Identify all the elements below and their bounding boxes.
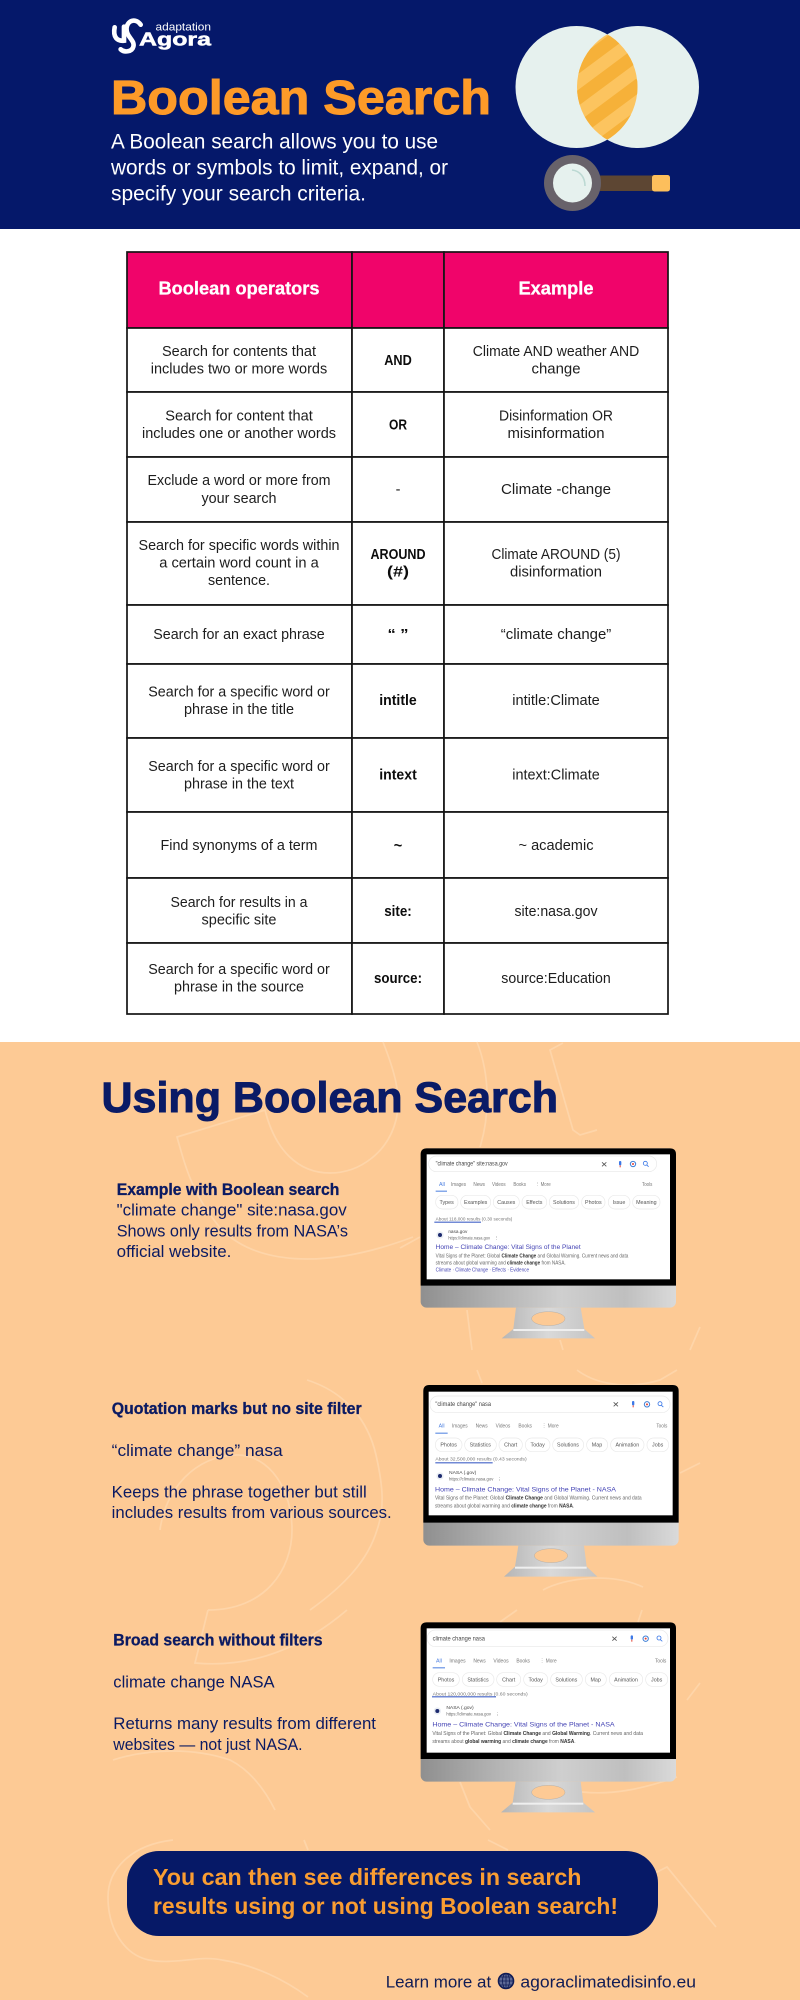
monitor: site filter results: Books	[513, 1182, 526, 1188]
row: AND: Search for contents that	[162, 344, 316, 360]
row: OR: includes one or another words	[142, 426, 336, 442]
row: AROUND: (#)	[387, 564, 409, 580]
monitor: quotation results: NASA (.gov)	[449, 1470, 477, 1476]
monitor: site filter results: https://climate.nasa.gov	[448, 1235, 491, 1240]
row: AROUND: sentence.	[208, 573, 270, 589]
row: exact phrase: Search for an exact phrase	[153, 627, 325, 643]
row: intitle: Search for a specific word or	[148, 684, 330, 700]
monitor: broad search results: Vital Signs of the Planet: Global Climate Change and Global Warming. Current news and data	[432, 1731, 643, 1737]
text block: quotation marks: “climate change” nasa	[112, 1442, 284, 1460]
monitor: quotation results: Books	[518, 1424, 532, 1430]
row: OR: Search for content that	[165, 408, 313, 424]
monitor: quotation results: Photos	[440, 1443, 457, 1449]
monitor: broad search results: Books	[516, 1658, 530, 1664]
monitor: quotation results: Images	[452, 1424, 468, 1430]
monitor: quotation results: Map	[592, 1443, 602, 1449]
row: exact phrase: “climate change”	[501, 627, 611, 643]
monitor: site filter results: Meaning	[636, 1200, 657, 1206]
footer: learn more	[386, 1972, 696, 1992]
row: AROUND: a certain word count in a	[159, 556, 320, 572]
monitor: quotation results: Vital Signs of the Planet: Global Climate Change and Global Warming. Current news and data	[435, 1496, 642, 1502]
text block: example with Boolean search: Example with Boolean search	[117, 1181, 339, 1199]
row: exact phrase	[127, 605, 668, 664]
monitor: site filter results	[421, 1148, 676, 1338]
search bar: "climate change" site:nasa.gov	[436, 1162, 508, 1168]
monitor: site filter results: Issue	[613, 1200, 625, 1206]
table: Boolean operators	[127, 252, 668, 1014]
table header row: Example	[518, 278, 594, 298]
row: AND	[127, 328, 668, 392]
row: source: source:	[374, 971, 422, 987]
monitor: broad search results: All	[436, 1658, 442, 1664]
monitor: quotation results: Videos	[496, 1424, 511, 1430]
monitor: site filter results: Climate · Climate Change · Effects · Evidence	[436, 1268, 529, 1274]
row: minus	[127, 457, 668, 522]
monitor: site filter results: streams about global warming and climate change from NASA.	[436, 1261, 566, 1267]
monitor: broad search results: Today	[529, 1677, 543, 1683]
row: synonyms: Find synonyms of a term	[160, 838, 318, 854]
monitor: site filter results: ⋮ More	[535, 1182, 551, 1188]
callout: differences in search results	[127, 1851, 658, 1936]
search bar	[429, 1156, 657, 1172]
text block: example with Boolean search: official website.	[117, 1243, 231, 1261]
row: synonyms	[127, 812, 668, 878]
row: intext	[127, 738, 668, 812]
row: AND: includes two or more words	[151, 362, 327, 378]
panel: header	[0, 0, 800, 229]
row: minus: Exclude a word or more from	[148, 473, 330, 489]
row: AROUND: Climate AROUND (5)	[492, 547, 620, 563]
monitor: site filter results: nasa.gov	[448, 1229, 468, 1235]
intro text	[110, 130, 448, 206]
text block: broad search: Returns many results from different	[113, 1715, 376, 1733]
monitor: quotation results: Solutions	[557, 1443, 579, 1449]
monitor: broad search results: About 120,000,000 results (0.60 seconds)	[433, 1691, 528, 1697]
monitor: quotation results: About 32,500,000 results (0.43 seconds)	[435, 1457, 527, 1463]
row: intitle: intitle	[379, 693, 417, 709]
monitor: site filter results: Home – Climate Change: Vital Signs of the Planet	[436, 1244, 581, 1251]
row: synonyms: ~	[394, 838, 402, 854]
monitor: broad search results: NASA (.gov)	[446, 1705, 474, 1711]
intro text: words or symbols to limit, expand, or	[110, 156, 448, 180]
monitor: site filter results: Images	[451, 1182, 466, 1188]
monitor: quotation results: Statistics	[470, 1443, 491, 1449]
row: minus: -	[396, 482, 401, 498]
monitor: site filter results: Examples	[464, 1200, 488, 1206]
text block: quotation marks: includes results from various sources.	[112, 1504, 392, 1522]
monitor: site filter results: Solutions	[553, 1200, 575, 1206]
monitor: site filter results: Causes	[497, 1200, 516, 1206]
monitor: broad search results: Tools	[655, 1658, 667, 1664]
text block: broad search: climate change NASA	[113, 1674, 275, 1692]
monitor: broad search results: Images	[449, 1658, 466, 1664]
monitor: quotation results: Home – Climate Change: Vital Signs of the Planet - NASA	[435, 1486, 617, 1493]
text block: quotation marks: Quotation marks but no site filter	[112, 1400, 362, 1418]
row: AROUND	[127, 522, 668, 605]
search bar: climate change nasa	[433, 1636, 486, 1642]
text block: broad search	[112, 1632, 376, 1754]
callout: differences in search results: You can then see differences in search	[153, 1864, 582, 1890]
search bar	[430, 1396, 670, 1413]
monitor: quotation results: Today	[531, 1443, 545, 1449]
monitor: broad search results: ⋮	[495, 1712, 500, 1717]
row: exact phrase: “ ”	[388, 627, 408, 643]
text block: quotation marks: Keeps the phrase together but still	[112, 1483, 367, 1501]
row: intext: intext:Climate	[512, 768, 600, 784]
monitor: quotation results: ⋮	[497, 1477, 502, 1482]
monitor: broad search results: Solutions	[555, 1677, 578, 1683]
monitor: broad search results: streams about global warming and climate change from NASA.	[432, 1739, 576, 1745]
monitor: site filter results: Types	[440, 1200, 454, 1206]
monitor: broad search results: https://climate.nasa.gov	[446, 1712, 492, 1717]
monitor: broad search results: ⋮ More	[540, 1658, 557, 1664]
monitor: quotation results: News	[476, 1424, 488, 1430]
row: source: phrase in the source	[174, 980, 304, 996]
search bar: "climate change" nasa	[435, 1402, 492, 1408]
monitor: broad search results: Statistics	[467, 1677, 489, 1683]
row: source	[127, 943, 668, 1014]
monitor: broad search results: Home – Climate Change: Vital Signs of the Planet - NASA	[432, 1721, 615, 1728]
row: minus: your search	[202, 491, 276, 507]
row: OR: OR	[389, 418, 407, 434]
row: OR: Disinformation OR	[499, 408, 613, 424]
text block: example with Boolean search: Shows only results from NASA’s	[117, 1223, 348, 1241]
monitor: quotation results: streams about global warming and climate change from NASA.	[435, 1503, 574, 1509]
table header row: Boolean operators	[158, 278, 320, 298]
row: site: site:	[384, 904, 412, 920]
monitor: site filter results: Photos	[585, 1200, 602, 1206]
row: OR	[127, 392, 668, 457]
section heading: Using Boolean Search	[102, 1074, 558, 1122]
monitor: quotation results: https://climate.nasa.gov	[449, 1477, 494, 1482]
row: site: specific site	[202, 912, 276, 928]
monitor: site filter results: Videos	[492, 1182, 506, 1188]
logo: Adaptation Agora: adaptation	[156, 22, 211, 34]
intro text: specify your search criteria.	[111, 182, 366, 206]
text block: broad search: Broad search without filters	[113, 1632, 323, 1650]
monitor: site filter results: About 118,000 results (0.30 seconds)	[436, 1217, 513, 1223]
monitor: site filter results: Tools	[642, 1182, 653, 1188]
monitor: site filter results: Vital Signs of the Planet: Global Climate Change and Global Warming. Current news and data	[436, 1253, 628, 1259]
footer: learn more: Learn more at	[386, 1972, 491, 1992]
title: Boolean Search	[111, 72, 491, 125]
monitor: broad search results: Animation	[614, 1677, 638, 1683]
row: AROUND: Search for specific words within	[138, 538, 340, 554]
monitor: site filter results: Effects	[526, 1200, 543, 1206]
monitor: broad search results: News	[473, 1658, 486, 1664]
icon: globe	[498, 1974, 514, 1988]
text block: broad search: websites — not just NASA.	[112, 1736, 303, 1754]
row: intext: Search for a specific word or	[148, 759, 330, 775]
monitor: quotation results	[423, 1385, 679, 1577]
monitor: broad search results: Map	[590, 1677, 601, 1683]
monitor: broad search results: Chart	[502, 1677, 516, 1683]
row: intitle: phrase in the title	[184, 702, 294, 718]
monitor: quotation results: Jobs	[652, 1443, 664, 1449]
icon: venn diagram	[516, 26, 699, 148]
row: AND: AND	[384, 353, 412, 369]
logo: Adaptation Agora: Agora	[139, 30, 212, 50]
row: AROUND: disinformation	[510, 564, 602, 580]
text block: quotation marks	[112, 1400, 392, 1522]
row: intitle	[127, 664, 668, 738]
row: OR: misinformation	[508, 426, 604, 442]
row: site: Search for results in a	[170, 895, 308, 911]
row: minus: Climate -change	[501, 482, 611, 498]
row: source: Search for a specific word or	[148, 962, 330, 978]
row: intitle: intitle:Climate	[512, 693, 600, 709]
monitor: quotation results: All	[439, 1424, 445, 1430]
row: AND: Climate AND weather AND	[473, 344, 639, 360]
row: site	[127, 878, 668, 943]
icon: magnifying glass	[544, 155, 670, 211]
row: intext: intext	[379, 768, 417, 784]
monitor: broad search results: Photos	[438, 1677, 455, 1683]
row: source: source:Education	[501, 971, 611, 987]
monitor: broad search results: Videos	[493, 1658, 509, 1664]
monitor: site filter results: All	[439, 1182, 445, 1188]
callout: differences in search results: results using or not using Boolean search!	[153, 1893, 618, 1919]
row: synonyms: ~ academic	[518, 838, 594, 854]
monitor: site filter results: ⋮	[494, 1236, 499, 1241]
monitor: broad search results: Jobs	[651, 1677, 663, 1683]
logo: Adaptation Agora	[114, 21, 212, 51]
monitor: quotation results: Chart	[504, 1443, 518, 1449]
text block: example with Boolean search: "climate change" site:nasa.gov	[117, 1202, 347, 1220]
monitor: quotation results: ⋮ More	[542, 1424, 559, 1430]
intro text: A Boolean search allows you to use	[111, 130, 438, 154]
row: intext: phrase in the text	[184, 776, 294, 792]
table header row	[127, 252, 668, 328]
row: AROUND: AROUND	[370, 547, 426, 563]
panel: using Boolean search	[0, 1042, 800, 2000]
text block: example with Boolean search	[117, 1181, 348, 1261]
monitor: quotation results: Tools	[656, 1424, 668, 1430]
monitor: site filter results: News	[473, 1182, 485, 1188]
footer: learn more: agoraclimatedisinfo.eu	[520, 1972, 696, 1992]
search bar	[427, 1630, 668, 1647]
row: AND: change	[532, 362, 580, 378]
row: site: site:nasa.gov	[514, 904, 598, 920]
monitor: broad search results	[421, 1622, 676, 1812]
monitor: quotation results: Animation	[615, 1443, 639, 1449]
